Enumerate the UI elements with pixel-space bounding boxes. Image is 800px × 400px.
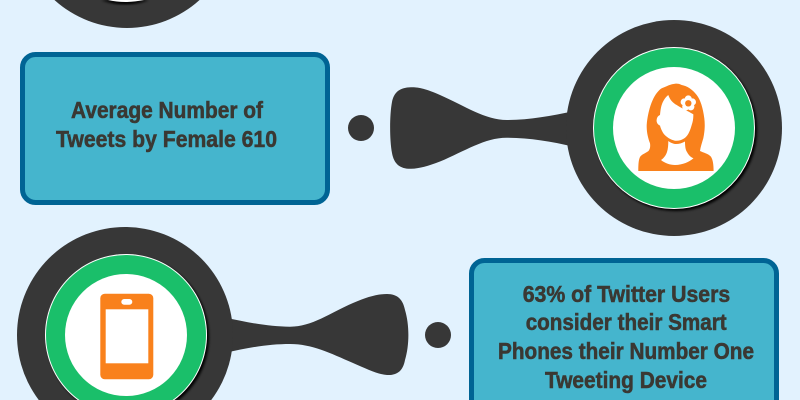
panel: average tweets by female <box>22 54 328 202</box>
text: smart phone statistic: Tweeting Device <box>545 367 707 393</box>
text: smart phone statistic: consider their Smart <box>526 309 727 335</box>
icon: woman in badge <box>566 20 782 236</box>
icon: woman silhouette <box>638 84 714 171</box>
panel: top badge cut off at the top edge <box>54 0 200 28</box>
icon: smartphone <box>100 294 153 379</box>
badge ring <box>566 20 782 236</box>
panel: smart phone tweeting device <box>472 260 776 400</box>
text: average number of tweets: Tweets by Female 610 <box>56 126 277 152</box>
text: average number of tweets: Average Number of <box>71 97 263 123</box>
info box <box>472 260 776 400</box>
badge ring <box>17 227 233 400</box>
info box <box>22 54 328 202</box>
connector: left spoon with dot <box>225 294 451 375</box>
icon: hair flower <box>681 95 696 110</box>
text: smart phone statistic: Phones their Number One <box>498 338 754 364</box>
text: average number of tweets <box>56 97 277 152</box>
connector: right spoon with dot <box>348 87 575 169</box>
text: smart phone statistic <box>498 281 754 393</box>
text: smart phone statistic: 63% of Twitter Users <box>523 281 730 307</box>
icon: smartphone in badge <box>17 227 233 400</box>
